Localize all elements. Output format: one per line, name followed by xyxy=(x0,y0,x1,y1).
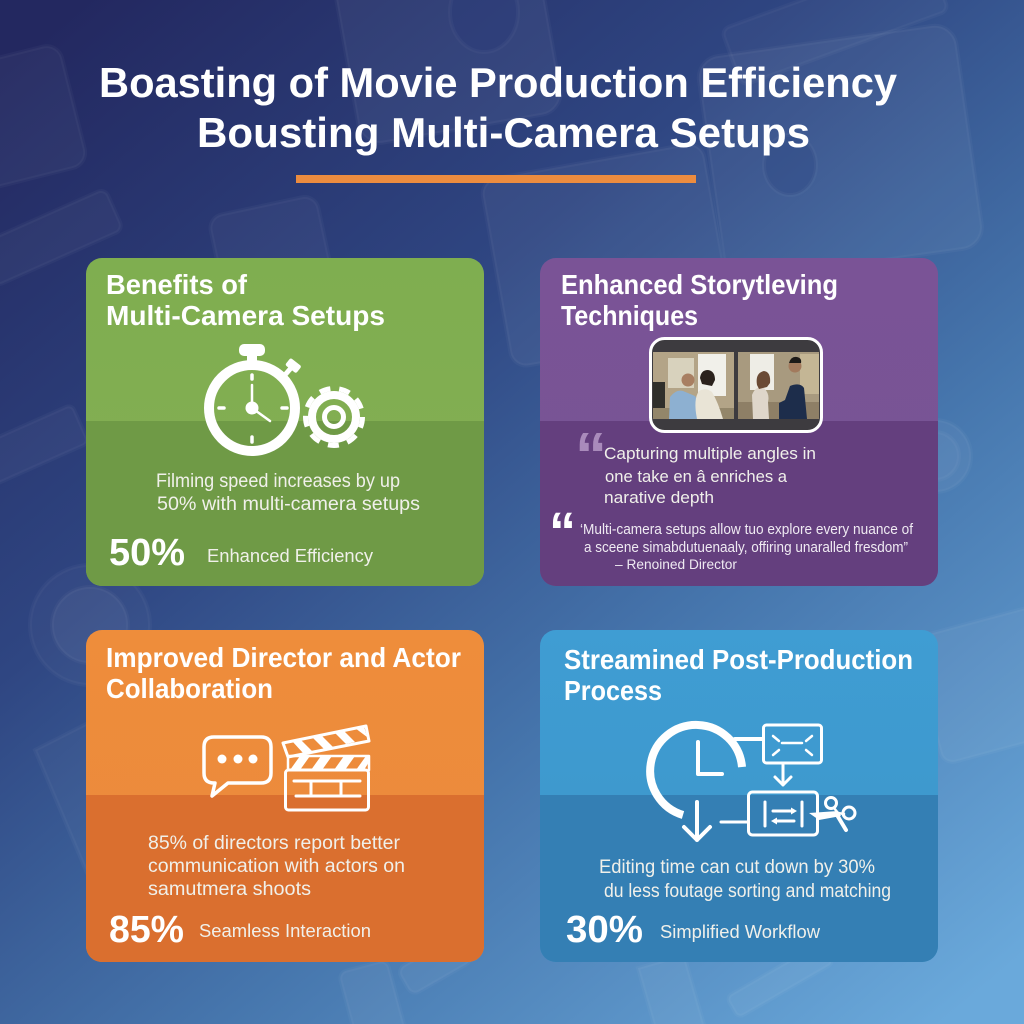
icon: quote mark: “ xyxy=(575,419,607,491)
heading: benefits: Benefits of xyxy=(106,269,248,300)
text: director quote xyxy=(580,521,914,572)
text: directors report: samutmera shoots xyxy=(148,879,311,900)
heading: storytelling: Enhanced Storytleving xyxy=(561,269,838,300)
stat label: simplified workflow: Simplified Workflow xyxy=(660,922,821,942)
heading: collaboration: Improved Director and Actor xyxy=(106,642,461,673)
heading: storytelling xyxy=(561,269,838,331)
icon: quote mark white: “ xyxy=(549,502,576,562)
stat: 30%: 30% xyxy=(566,909,643,951)
text: editing time xyxy=(599,857,891,902)
heading: collaboration xyxy=(106,642,461,704)
stat: 50%: 50% xyxy=(109,532,185,574)
icon: speech bubble xyxy=(204,737,271,796)
text: director quote: a sceene simabdutuenaaly, offiring unaralled fresdom” xyxy=(584,539,908,556)
image: split-screen film frames xyxy=(650,338,822,432)
stat label: enhanced efficiency: Enhanced Efficiency xyxy=(207,546,373,566)
text: capturing multiple angles xyxy=(604,444,816,507)
icon: stopwatch and gear xyxy=(209,344,362,451)
title underline xyxy=(296,175,696,183)
text: capturing multiple angles: narative depth xyxy=(604,488,714,507)
text: filming speed: 50% with multi-camera setups xyxy=(157,494,420,515)
icon: clapperboard xyxy=(283,726,369,810)
heading: collaboration: Collaboration xyxy=(106,673,273,704)
stat: 85%: 85% xyxy=(109,909,184,951)
text: filming speed xyxy=(156,471,420,515)
heading: benefits xyxy=(106,269,385,331)
panel: streamlined post-production xyxy=(540,630,938,962)
panel: enhanced storytelling techniques xyxy=(540,258,938,586)
text: directors report: communication with actors on xyxy=(148,856,405,877)
title: Bousting Multi-Camera Setups xyxy=(197,109,810,156)
text: filming speed: Filming speed increases by up xyxy=(156,471,400,492)
icon: editing workflow xyxy=(650,725,855,840)
heading: storytelling: Techniques xyxy=(561,300,698,331)
text: director quote: ‘Multi-camera setups allow tuo explore every nuance of xyxy=(580,521,914,538)
heading: post-production: Process xyxy=(564,675,662,706)
title xyxy=(99,59,898,156)
title: Boasting of Movie Production Efficiency xyxy=(99,59,898,106)
heading: post-production xyxy=(564,644,913,706)
heading: post-production: Streamined Post-Production xyxy=(564,644,913,675)
text: capturing multiple angles: one take en â enriches a xyxy=(605,467,788,486)
text: director quote: – Renoined Director xyxy=(615,556,737,572)
panel: director and actor collaboration xyxy=(86,630,484,962)
stat label: seamless interaction: Seamless Interaction xyxy=(199,921,371,941)
panel: benefits of multi-camera setups xyxy=(86,258,484,586)
heading: benefits: Multi-Camera Setups xyxy=(106,300,385,331)
text: editing time: Editing time can cut down by 30% xyxy=(599,857,875,878)
text: capturing multiple angles: Capturing multiple angles in xyxy=(604,444,816,463)
text: editing time: du less foutage sorting and matching xyxy=(604,881,891,902)
text: directors report xyxy=(148,833,405,900)
text: directors report: 85% of directors report better xyxy=(148,833,401,854)
